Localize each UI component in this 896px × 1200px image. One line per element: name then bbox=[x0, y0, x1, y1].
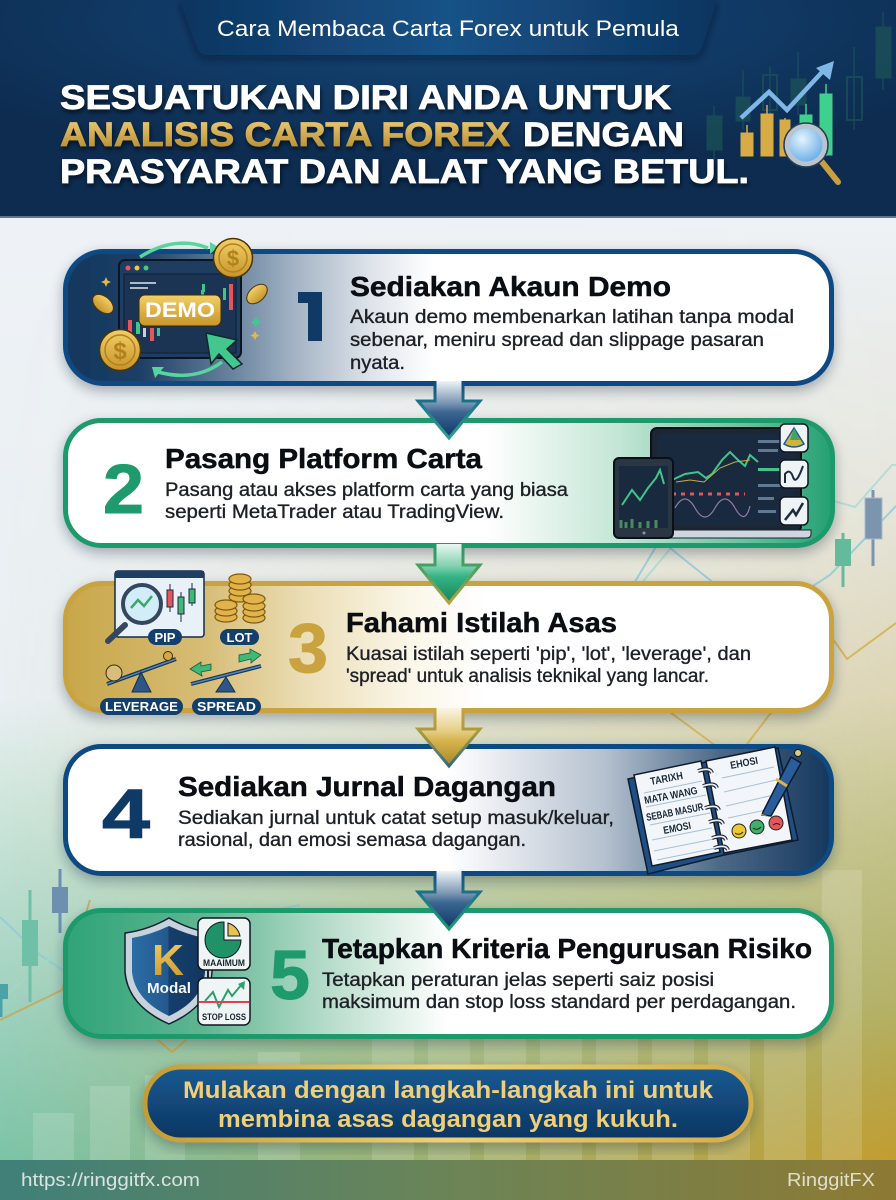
icon: demo account window with coins: $ bbox=[113, 338, 127, 365]
badge: maximum size bbox=[198, 918, 250, 978]
step 3 heading: Fahami Istilah Asas bbox=[346, 607, 617, 638]
callout: closing message bbox=[145, 1067, 751, 1140]
step number 1 bbox=[298, 292, 322, 341]
step 2 description: seperti MetaTrader atau TradingView. bbox=[165, 502, 504, 523]
step 3 description bbox=[346, 644, 751, 687]
footer bar bbox=[0, 1160, 896, 1200]
icon: pip, lot, leverage and spread bbox=[100, 571, 265, 715]
icon: laptop, tablet and platform badges bbox=[614, 424, 811, 538]
step 1 description: sebenar, meniru spread dan slippage pasaran bbox=[350, 330, 764, 351]
icon: trading journal with pen bbox=[628, 747, 802, 874]
panel: step 1 bbox=[66, 238, 832, 384]
icon: trading journal with pen: EMOSI bbox=[662, 820, 692, 837]
icon: capital shield: Modal bbox=[147, 980, 191, 997]
pill: PIP bbox=[148, 629, 182, 645]
icon: demo account window with coins: $ bbox=[227, 246, 239, 271]
arrow 4 to 5 bbox=[418, 871, 480, 929]
main title: SESUATUKAN DIRI ANDA UNTUK bbox=[60, 79, 671, 117]
icon: demo account window with coins bbox=[89, 238, 271, 378]
card 3 background bbox=[66, 584, 832, 710]
step 4 heading: Sediakan Jurnal Dagangan bbox=[178, 771, 556, 802]
step 5 heading: Tetapkan Kriteria Pengurusan Risiko bbox=[322, 933, 812, 964]
footer brand: RinggitFX bbox=[787, 1170, 875, 1190]
panel: step 3 bbox=[66, 571, 832, 715]
step number 2: 2 bbox=[103, 450, 144, 528]
pill: LOT bbox=[220, 629, 259, 645]
main title bbox=[60, 79, 749, 191]
step 1 description bbox=[350, 307, 794, 374]
demo badge: DEMO bbox=[145, 299, 215, 322]
page background bbox=[0, 319, 896, 1160]
pill: LOT: LOT bbox=[226, 630, 253, 645]
step 3 description: 'spread' untuk analisis teknikal yang lancar. bbox=[346, 666, 709, 687]
arrow 3 to 4 bbox=[418, 708, 480, 766]
card 1 background bbox=[66, 252, 832, 384]
pill: PIP: PIP bbox=[155, 630, 176, 645]
pill: LEVERAGE: LEVERAGE bbox=[105, 699, 178, 714]
background candles bbox=[0, 490, 882, 1017]
icon: header chart and magnifier bbox=[707, 12, 891, 182]
panel: step 4 bbox=[66, 746, 832, 874]
header tab with subtitle bbox=[180, 0, 717, 55]
icon: trading journal with pen: TARIXH bbox=[649, 770, 684, 788]
main title: DENGAN bbox=[523, 116, 684, 154]
panel: step 5 bbox=[66, 910, 832, 1036]
demo badge bbox=[139, 295, 221, 326]
step 1 heading: Sediakan Akaun Demo bbox=[350, 271, 671, 302]
step 1 description: nyata. bbox=[350, 353, 405, 374]
icon: trading journal with pen: MATA WANG bbox=[643, 785, 699, 807]
step number 3: 3 bbox=[288, 609, 328, 687]
step number 5: 5 bbox=[270, 936, 310, 1014]
icon: capital shield bbox=[125, 918, 212, 1024]
card 5 background bbox=[66, 910, 832, 1036]
arrow 1 to 2 bbox=[418, 381, 480, 438]
callout: closing message: Mulakan dengan langkah-langkah ini untuk bbox=[183, 1077, 714, 1104]
step 5 description: maksimum dan stop loss standard per perdagangan. bbox=[322, 992, 796, 1013]
badge: stop loss: STOP LOSS bbox=[202, 1012, 246, 1023]
step number 4: 4 bbox=[102, 775, 150, 853]
main title: PRASYARAT DAN ALAT YANG BETUL. bbox=[60, 153, 749, 191]
icon: trading journal with pen: SEBAB MASUR bbox=[645, 801, 705, 824]
step 4 description bbox=[178, 808, 614, 851]
step 2 description: Pasang atau akses platform carta yang biasa bbox=[165, 480, 568, 501]
icon: trading journal with pen: EHOSI bbox=[729, 755, 759, 772]
icon: capital shield: K bbox=[152, 936, 184, 985]
pill: SPREAD: SPREAD bbox=[197, 699, 256, 714]
step 4 description: rasional, dan emosi semasa dagangan. bbox=[178, 830, 526, 851]
pill: SPREAD bbox=[192, 698, 261, 715]
badge: stop loss bbox=[198, 978, 250, 1025]
footer url: https://ringgitfx.com bbox=[21, 1170, 200, 1190]
step 5 description bbox=[322, 970, 796, 1013]
header tab with subtitle: Cara Membaca Carta Forex untuk Pemula bbox=[217, 16, 680, 41]
header band bbox=[0, 0, 896, 218]
card 2 background bbox=[66, 420, 832, 546]
step 2 heading: Pasang Platform Carta bbox=[165, 443, 482, 474]
panel: step 2 bbox=[66, 420, 832, 546]
arrow 2 to 3 bbox=[418, 544, 480, 603]
main title: ANALISIS CARTA FOREX bbox=[60, 116, 510, 154]
step 4 description: Sediakan jurnal untuk catat setup masuk/keluar, bbox=[178, 808, 614, 829]
step 2 description bbox=[165, 480, 568, 523]
badge: maximum size: MAAIMUM bbox=[203, 958, 245, 969]
step 1 description: Akaun demo membenarkan latihan tanpa modal bbox=[350, 307, 794, 328]
step 3 description: Kuasai istilah seperti 'pip', 'lot', 'leverage', dan bbox=[346, 644, 751, 665]
card 4 background bbox=[66, 746, 832, 874]
callout: closing message: membina asas dagangan yang kukuh. bbox=[218, 1106, 678, 1133]
step 5 description: Tetapkan peraturan jelas seperti saiz posisi bbox=[322, 970, 714, 991]
